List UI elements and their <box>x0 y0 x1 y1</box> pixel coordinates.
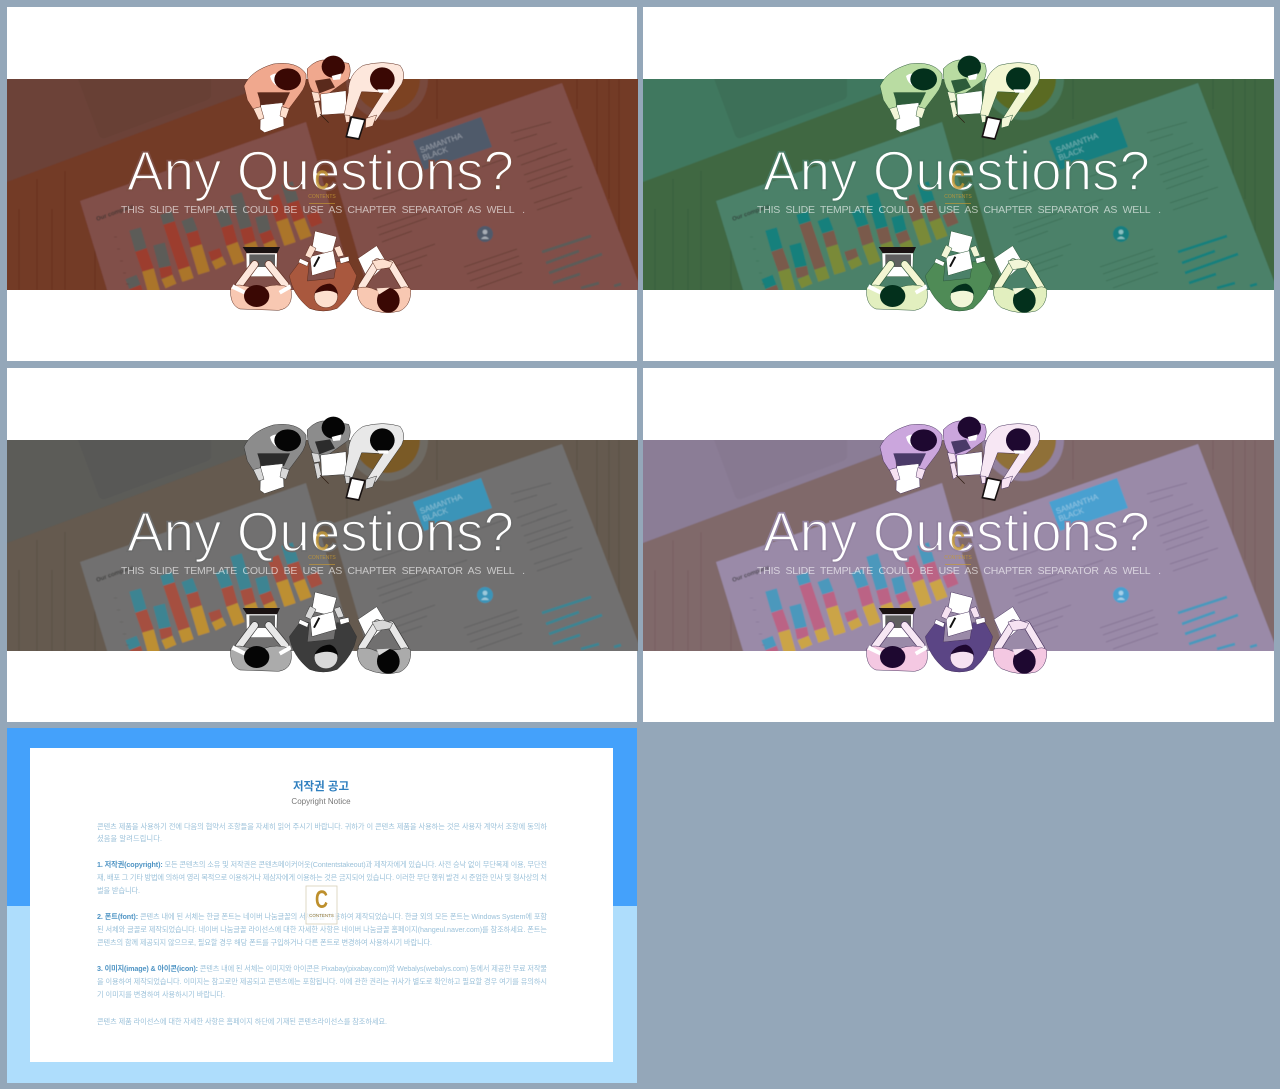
photo band: laptop, chart paper, resume on wood desk <box>643 79 1274 290</box>
watermark logo: C <box>315 165 329 195</box>
notice card <box>30 748 613 1062</box>
watermark logo: CONTENTS <box>944 555 972 561</box>
illustration: six people around desk <box>867 417 1047 674</box>
photo band: laptop, chart paper, resume on wood desk <box>643 440 1274 651</box>
intro paragraph <box>97 822 547 843</box>
clause 1: copyright: 1. 저작권(copyright): 모든 콘텐츠의 소유 및 저작권은 콘텐츠메이커어웃(Contentstakeout)과 제작자에게 있습니다. 사전 승낙 없이 무단복제 이용, 무단전 <box>97 860 547 869</box>
clause 2: font: 된 서체와 글꼴로 제작되었습니다. 네이버 나눔글꼴 라이선스에 대한 자세한 사항은 네이버 나눔글꼴 홈페이지(hangeul.naver.com)를 참조하세요. 폰트는 <box>97 925 547 934</box>
panel: brown slide <box>4 7 641 361</box>
heading: 저작권 공고 <box>293 779 349 793</box>
clause 3: image and icon: 을 이용하여 제작되었습니다. 이미지는 참고로만 제공되고 콘텐츠에는 포함됩니다. 이에 관한 권리는 귀사가 별도로 확인하고 필요할 경우 여기를 유의하시 <box>97 977 547 986</box>
intro paragraph: 셨음을 알려드립니다. <box>97 834 162 843</box>
subtitle: THIS SLIDE TEMPLATE COULD BE USE AS CHAPTER SEPARATOR AS WELL . <box>121 204 525 216</box>
watermark logo <box>308 526 336 565</box>
panel: grey slide <box>4 368 641 722</box>
panel: purple slide <box>640 368 1277 722</box>
clause 2: font <box>97 912 547 947</box>
watermark logo: CONTENTS <box>944 194 972 200</box>
title: Any Questions? <box>127 500 514 563</box>
watermark badge <box>306 886 337 924</box>
clause 3: image and icon <box>97 964 547 999</box>
title: Any Questions? <box>127 139 514 202</box>
clause 2: font: 콘텐츠의 함께 제공되지 않으므로, 필요할 경우 해당 폰트를 구입하거나 다른 폰트로 변경하여 사용하시기 바랍니다. <box>97 938 432 947</box>
illustration: six people around desk <box>231 56 411 313</box>
watermark badge: CONTENTS <box>309 913 334 918</box>
closing line: 콘텐츠 제품 라이선스에 대한 자세한 사항은 홈페이지 하단에 기재된 콘텐츠라이선스를 참조하세요. <box>97 1017 387 1026</box>
subtitle: THIS SLIDE TEMPLATE COULD BE USE AS CHAPTER SEPARATOR AS WELL . <box>757 204 1161 216</box>
watermark logo <box>308 165 336 204</box>
title: Any Questions? <box>763 139 1150 202</box>
photo band: laptop, chart paper, resume on wood desk <box>7 79 638 290</box>
title: Any Questions? <box>763 500 1150 563</box>
clause 3: image and icon: 3. 이미지(image) & 아이콘(icon): 콘텐츠 내에 된 서체는 이미지와 아이콘은 Pixabay(pixabay.com)와 Webalys(webalys.com) 등에서 제공한 무료 저작물 <box>97 964 547 973</box>
clause 3: image and icon: 기 이미지를 변경하여 사용하시기 바랍니다. <box>97 990 225 999</box>
watermark logo: CONTENTS <box>308 555 336 561</box>
watermark logo <box>944 526 972 565</box>
subtitle: THIS SLIDE TEMPLATE COULD BE USE AS CHAPTER SEPARATOR AS WELL . <box>757 565 1161 577</box>
watermark logo: C <box>951 165 965 195</box>
subheading: Copyright Notice <box>291 797 351 806</box>
watermark logo <box>944 165 972 204</box>
clause 2: font: 2. 폰트(font): 콘텐츠 내에 된 서체는 한글 폰트는 네이버 나눔글꼴의 서체들을 이용하여 제작되었습니다. 한글 외의 모든 폰트는 Windows System에 포함 <box>97 912 547 921</box>
subtitle: THIS SLIDE TEMPLATE COULD BE USE AS CHAPTER SEPARATOR AS WELL . <box>121 565 525 577</box>
watermark logo: CONTENTS <box>308 194 336 200</box>
illustration: six people around desk <box>231 417 411 674</box>
clause 1: copyright: 벌을 받습니다. <box>97 886 140 895</box>
panel: green slide <box>640 7 1277 361</box>
illustration: six people around desk <box>867 56 1047 313</box>
clause 1: copyright <box>97 860 547 895</box>
photo band: laptop, chart paper, resume on wood desk <box>7 440 638 651</box>
clause 1: copyright: 재, 배포 그 기타 방법에 의하여 영리 목적으로 이용하거나 제삼자에게 이용하는 것은 금지되어 있습니다. 이러한 무단 행위 발견 시 준엄한 민사 및 형사상의 처 <box>97 873 547 882</box>
watermark badge: C <box>315 886 328 914</box>
intro paragraph: 콘텐츠 제품을 사용하기 전에 다음의 협약서 조항들을 자세히 읽어 주시기 바랍니다. 귀하가 이 콘텐츠 제품을 사용하는 것은 사용자 계약서 조항에 동의하 <box>97 822 547 831</box>
panel: copyright notice <box>7 728 637 1083</box>
watermark logo: C <box>951 526 965 556</box>
watermark logo: C <box>315 526 329 556</box>
